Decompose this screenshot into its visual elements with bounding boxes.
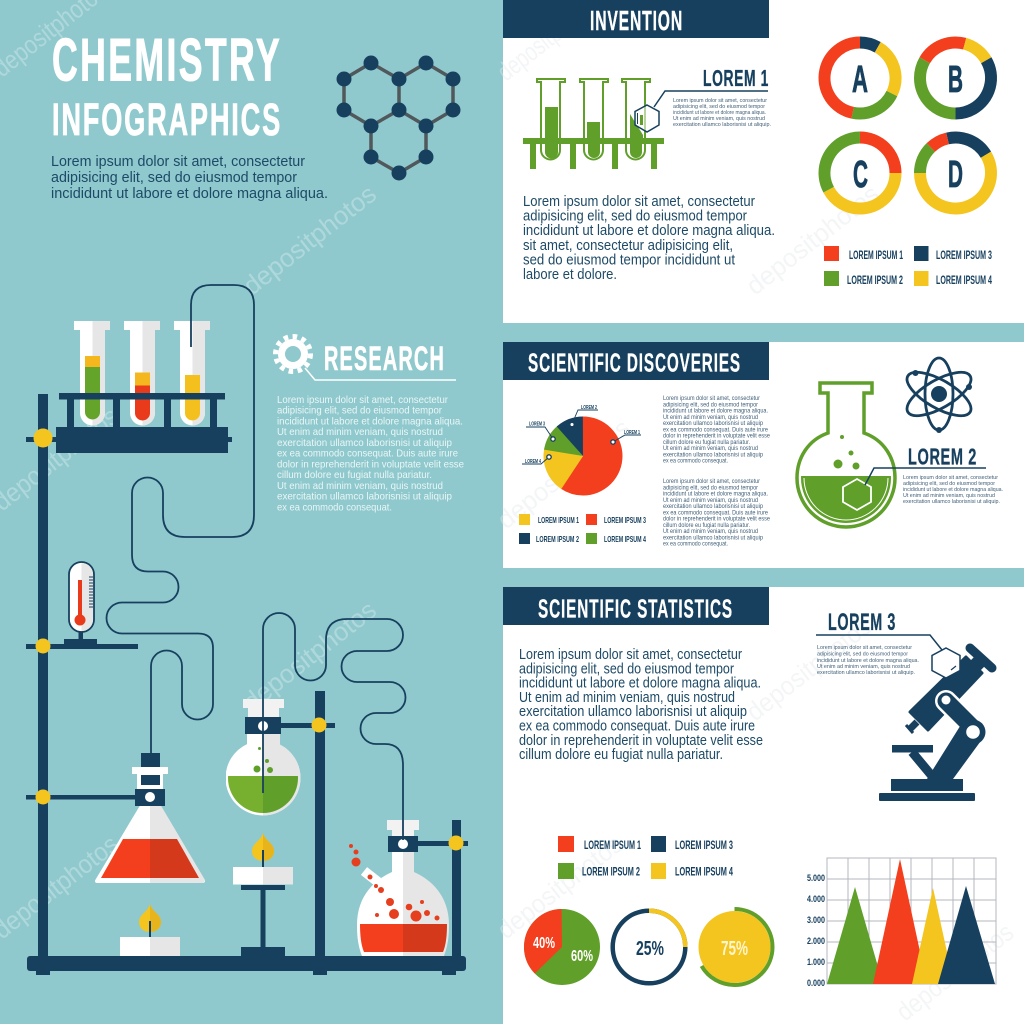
callout: lorem 3 (816, 609, 942, 676)
donut chart C: C (853, 154, 868, 196)
intro text block (51, 154, 328, 202)
statistics text block: dolor in reprehenderit in voluptate velit esse (519, 733, 763, 749)
discoveries text column: upper: Ut enim ad minim veniam, quis nostrud (663, 445, 758, 452)
invention text block: labore et dolore. (523, 267, 617, 283)
chart: triangle bars: 5.000 (807, 873, 825, 883)
callout: lorem 1: Lorem ipsum dolor sit amet, consectetur (673, 98, 767, 104)
connecting tube: test tube to conical flask (106, 285, 254, 754)
pie chart: 40 / 60: 40% (533, 935, 555, 952)
chart: triangle bars: 0.000 (807, 978, 825, 988)
callout: lorem 1 (635, 65, 771, 132)
legend: invention (824, 246, 992, 287)
heading: research: RESEARCH (324, 340, 445, 378)
discoveries text column: upper (663, 395, 770, 465)
panel: invention (503, 0, 1006, 287)
watermark text: depositphotos (237, 179, 382, 301)
legend: discoveries: LOREM IPSUM 2 (536, 534, 579, 544)
intro text block: adipisicing elit, sed do eiusmod tempor (51, 170, 297, 186)
discoveries header: SCIENTIFIC DISCOVERIES (528, 348, 741, 378)
research text block (277, 394, 464, 513)
legend: discoveries: LOREM IPSUM 1 (538, 515, 579, 525)
discoveries text column: upper: exercitation ullamco laborisnisi ut aliquip (663, 420, 763, 427)
icon: atom (901, 358, 977, 433)
discoveries text column: upper: ex ea commodo consequat. (663, 458, 728, 465)
callout: lorem 2: Ut enim ad minim veniam, quis nostrud (903, 493, 995, 499)
chart: triangle bars: 2.000 (807, 936, 825, 946)
research text block: exercitation ullamco laborisnisi ut aliquip (277, 437, 452, 449)
chart: triangle bars: 4.000 (807, 894, 825, 904)
callout: lorem 1: exercitation ullamco laborisnisi ut aliquip. (673, 122, 771, 128)
research text block: cillum dolore eu fugiat nulla pariatur. (277, 469, 432, 481)
ring chart: 25 percent (613, 911, 685, 983)
candle burner on stand (233, 833, 293, 957)
pie chart: 40 / 60 (524, 909, 600, 985)
candle burner left (120, 904, 180, 956)
intro text block: incididunt ut labore et dolore magna aliqua. (51, 186, 328, 202)
callout: lorem 1: Ut enim ad minim veniam, quis nostrud (673, 116, 765, 122)
pie chart: LOREM 4 (525, 459, 542, 465)
discoveries text column: upper: adipisicing elit, sed do eiusmod tempor (663, 401, 758, 408)
donut chart A (812, 30, 908, 126)
icon: microscope (879, 648, 992, 801)
icon: research gear (276, 336, 456, 380)
donut chart C (812, 125, 908, 221)
statistics text block: Lorem ipsum dolor sit amet, consectetur (519, 647, 742, 663)
statistics text block: exercitation ullamco laborisnisi ut aliquip (519, 704, 747, 720)
callout: lorem 1: incididunt ut labore et dolore magna aliqua. (673, 110, 766, 116)
test tube rack (26, 393, 232, 453)
icon: thermometer (64, 562, 97, 645)
test tubes in rack (74, 321, 210, 426)
callout: lorem 2: LOREM 2 (908, 444, 977, 470)
discoveries text column: lower: dolor in reprehenderit in voluptate velit esse (663, 516, 770, 523)
discoveries text column: lower: ex ea commodo consequat. (663, 541, 728, 548)
panel: scientific discoveries (503, 342, 1003, 548)
research text block: adipisicing elit, sed do eiusmod tempor (277, 405, 442, 417)
callout: lorem 3: exercitation ullamco laborisnisi ut aliquip. (817, 670, 915, 676)
callout: lorem 3: adipisicing elit, sed do eiusmod tempor (817, 652, 908, 658)
callout: lorem 3: incididunt ut labore et dolore magna aliqua. (817, 658, 919, 664)
discoveries text column: lower: Ut enim ad minim veniam, quis nostrud (663, 497, 758, 504)
statistics text block: adipisicing elit, sed do eiusmod tempor (519, 661, 734, 677)
title: CHEMISTRY (52, 26, 282, 94)
statistics text block: ex ea commodo consequat. Duis aute irure (519, 718, 755, 734)
discoveries text column: upper: cillum dolore eu fugiat nulla pariatur. (663, 439, 750, 446)
research text block: Ut enim ad minim veniam, quis nostrud (277, 480, 443, 492)
legend: invention: LOREM IPSUM 1 (849, 250, 903, 262)
round flask with green liquid (226, 699, 303, 818)
invention header: INVENTION (590, 5, 683, 36)
legend: discoveries: LOREM IPSUM 3 (604, 515, 646, 525)
statistics header (503, 587, 769, 625)
pie chart: LOREM 3 (529, 422, 545, 428)
intro text block: Lorem ipsum dolor sit amet, consectetur (51, 154, 305, 170)
chart: triangle bars (807, 858, 996, 988)
invention text block: incididunt ut labore et dolore magna aliqua. (523, 223, 775, 239)
callout: lorem 2: adipisicing elit, sed do eiusmod tempor (903, 481, 995, 487)
ring chart: 75 percent (696, 909, 772, 985)
research text block: exercitation ullamco laborisnisi ut aliquip (277, 491, 452, 503)
discoveries text column: lower: cillum dolore eu fugiat nulla pariatur. (663, 522, 750, 529)
invention header (503, 0, 769, 38)
research text block: ex ea commodo consequat. (277, 501, 392, 513)
discoveries text column: upper: exercitation ullamco laborisnisi ut aliquip (663, 452, 763, 458)
callout: lorem 2: exercitation ullamco laborisnisi ut aliquip. (903, 499, 1000, 505)
watermark text: depositphotos (491, 829, 628, 945)
statistics text block (519, 647, 763, 763)
panel: scientific statistics (503, 587, 996, 988)
callout: lorem 1: LOREM 1 (703, 65, 769, 91)
icon: molecule (336, 56, 460, 180)
research text block: incididunt ut labore et dolore magna aliqua. (277, 416, 463, 428)
pie chart: LOREM 2 (581, 405, 597, 411)
discoveries text column: lower: exercitation ullamco laborisnisi ut aliquip (663, 503, 763, 510)
lab stand frame (26, 394, 468, 975)
legend: statistics (558, 836, 733, 879)
connecting tube: round flask to boiling flask (263, 613, 405, 840)
legend: statistics: LOREM IPSUM 3 (675, 840, 733, 852)
title: INFOGRAPHICS (52, 94, 282, 145)
discoveries text column: lower (663, 478, 770, 548)
callout: lorem 3: LOREM 3 (828, 609, 896, 636)
boiling flask with red liquid (349, 820, 451, 958)
discoveries text column: lower: ex ea commodo consequat. Duis aute irure (663, 509, 768, 516)
title (52, 26, 282, 145)
watermark text: depositphotos (740, 611, 877, 727)
research text block: Ut enim ad minim veniam, quis nostrud (277, 426, 443, 438)
callout: lorem 3: Lorem ipsum dolor sit amet, consectetur (817, 645, 912, 651)
pie chart (522, 405, 641, 484)
pie chart: LOREM 1 (624, 430, 640, 436)
discoveries text column: lower: exercitation ullamco laborisnisi ut aliquip (663, 534, 763, 542)
chart: triangle bars: 1.000 (807, 957, 825, 967)
donut chart D (905, 123, 1006, 223)
discoveries text column: lower: incididunt ut labore et dolore magna aliqua. (663, 490, 768, 498)
invention text block: sed do eiusmod tempor incididunt ut (523, 252, 735, 268)
callout: lorem 2: incididunt ut labore et dolore magna aliqua. (903, 487, 1003, 493)
callout: lorem 3: Ut enim ad minim veniam, quis nostrud (817, 664, 910, 670)
research text block: ex ea commodo consequat. Duis aute irure (277, 448, 458, 460)
statistics text block: Ut enim ad minim veniam, quis nostrud (519, 690, 735, 706)
discoveries text column: upper: incididunt ut labore et dolore magna aliqua. (663, 408, 768, 414)
discoveries text column: upper: Lorem ipsum dolor sit amet, consectetur (663, 395, 760, 402)
statistics header: SCIENTIFIC STATISTICS (538, 594, 733, 624)
conical flask with red liquid (97, 753, 205, 883)
legend: statistics: LOREM IPSUM 1 (584, 840, 641, 852)
icon: green test tubes (523, 79, 664, 169)
legend: invention: LOREM IPSUM 2 (847, 275, 903, 287)
discoveries text column: lower: adipisicing elit, sed do eiusmod tempor (663, 484, 758, 491)
discoveries text column: upper: ex ea commodo consequat. Duis aute irure (663, 426, 768, 433)
callout: lorem 2 (865, 444, 1003, 505)
discoveries text column: upper: dolor in reprehenderit in voluptate velit esse (663, 433, 770, 440)
research text block: dolor in reprehenderit in voluptate velit esse (277, 458, 464, 470)
statistics text block: incididunt ut labore et dolore magna aliqua. (519, 676, 761, 692)
legend: statistics: LOREM IPSUM 2 (582, 866, 640, 878)
icon: green round flask (797, 383, 895, 527)
discoveries header (503, 342, 769, 380)
callout: lorem 1: adipisicing elit, sed do eiusmod tempor (673, 104, 765, 110)
legend: statistics: LOREM IPSUM 4 (675, 866, 733, 878)
invention text block (523, 194, 775, 283)
discoveries text column: lower: Ut enim ad minim veniam, quis nostrud (663, 528, 758, 535)
donut chart B: B (948, 59, 963, 101)
invention text block: adipisicing elit, sed do eiusmod tempor (523, 208, 747, 224)
ring chart: 75 percent: 75% (721, 938, 748, 960)
callout: lorem 2: Lorem ipsum dolor sit amet, consectetur (903, 475, 998, 481)
pie chart: 40 / 60: 60% (571, 948, 593, 965)
watermark text: depositphotos (740, 179, 885, 301)
donut chart A: A (852, 59, 868, 101)
stand clamps (34, 428, 464, 850)
legend: discoveries: LOREM IPSUM 4 (604, 534, 646, 544)
donut chart B (907, 30, 1004, 126)
discoveries text column: lower: Lorem ipsum dolor sit amet, consectetur (663, 478, 760, 485)
watermark text: depositphotos (237, 595, 382, 717)
statistics text block: cillum dolore eu fugiat nulla pariatur. (519, 747, 723, 763)
ring chart: 25 percent: 25% (636, 938, 664, 960)
discoveries text column: upper: Ut enim ad minim veniam, quis nostrud (663, 414, 758, 421)
chart: triangle bars: 3.000 (807, 915, 825, 925)
invention text block: sit amet, consectetur adipisicing elit, (523, 238, 733, 254)
research text block: Lorem ipsum dolor sit amet, consectetur (277, 394, 448, 406)
invention text block: Lorem ipsum dolor sit amet, consectetur (523, 194, 755, 210)
donut chart D: D (948, 154, 963, 196)
legend: discoveries (519, 514, 646, 544)
watermark text: depositphotos (491, 413, 636, 535)
